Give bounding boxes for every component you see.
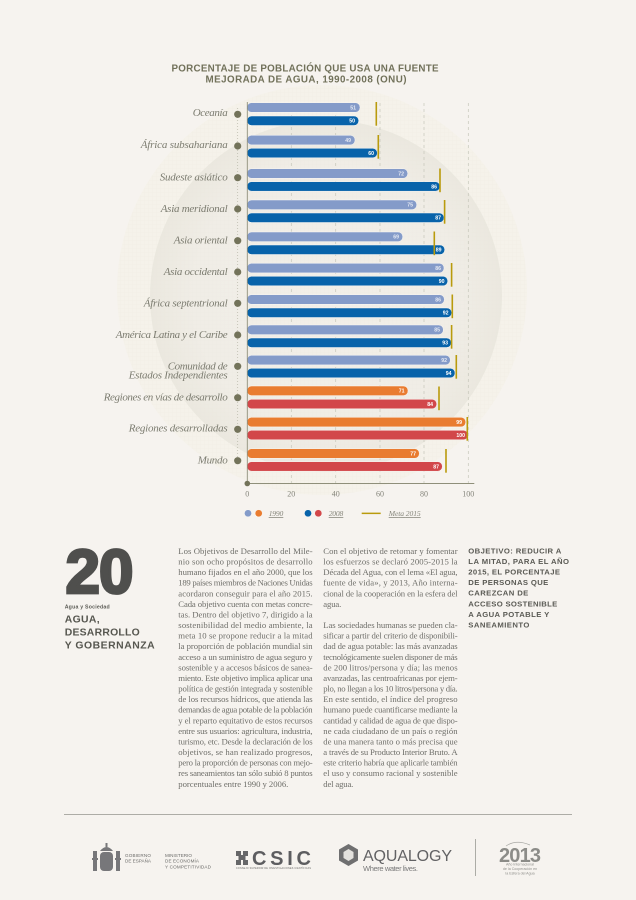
body text column 2: cantidad y calidad de agua de que dispo- — [323, 715, 458, 725]
legend: Meta 2015 — [388, 509, 421, 518]
bar row: Asia occidental: 90 — [439, 279, 445, 285]
bar row: Sudeste asiático: 86 — [431, 184, 437, 190]
bar row: Regiones desarrolladas: 99 — [456, 420, 462, 426]
bar row: Comunidad de Estados Independientes: Comunidad de — [168, 361, 228, 373]
body text column 1: Los Objetivos de Desarrollo del Mile- — [178, 546, 313, 556]
chart axes — [244, 102, 474, 499]
bar row: Sudeste asiático: 72 — [398, 171, 404, 177]
body text column 1: meta 10 se propone reducir a la mitad — [178, 631, 313, 641]
icon: Aqualogy cube — [339, 844, 358, 866]
chart axes: 40 — [332, 490, 340, 499]
bar row: África septentrional — [143, 294, 453, 318]
background concentric circles — [117, 85, 527, 495]
bar row: Oceanía — [193, 102, 377, 126]
bar row: Regiones en vías de desarrollo: Regiones en vías de desarrollo — [103, 391, 228, 403]
objective callout: DE PERSONAS QUE — [468, 578, 548, 587]
bar row: América Latina y el Caribe: América Latina y el Caribe — [115, 329, 228, 341]
bar row: Sudeste asiático: Sudeste asiático — [160, 172, 228, 184]
bar row: Asia oriental: 89 — [436, 248, 442, 254]
logo: Gobierno de España: DE ECONOMÍA — [165, 858, 200, 864]
logo: 2013 Año Internacional de la Cooperación: 2013 — [499, 845, 541, 867]
bar row: Asia occidental — [163, 263, 452, 287]
icon: CSIC mosaic — [236, 851, 248, 865]
logo: 2013 Año Internacional de la Cooperación: Año Internacional — [506, 862, 534, 866]
bar row: Asia meridional: 87 — [435, 216, 441, 222]
bar row: África subsahariana — [140, 135, 379, 159]
title: PORCENTAJE DE POBLACIÓN QUE USA UNA FUENTE — [172, 62, 439, 74]
chart axes: 100 — [462, 490, 474, 499]
objective callout: CAREZCAN DE — [468, 589, 528, 598]
logo: 2013 Año Internacional de la Cooperación: de la Cooperación en — [503, 867, 537, 871]
body text column 2: de 200 litros/persona y día; las menos — [323, 662, 458, 672]
bar row: Asia meridional: 75 — [407, 203, 413, 209]
chart axes: 0 — [245, 490, 249, 499]
body text column 1: entre sus usuarios: agricultura, industria, — [178, 726, 313, 736]
bar row: Mundo — [197, 449, 447, 473]
objective callout: SANEAMIENTO — [468, 620, 529, 630]
body text column 1: pero la proporción de personas con mejo- — [178, 758, 313, 768]
bar row: Regiones desarrolladas: Regiones desarrolladas — [128, 423, 228, 435]
body text column 1: sostenible y a accesos básicos de sanea- — [178, 662, 313, 672]
bar row: América Latina y el Caribe — [115, 325, 452, 349]
objective callout: OBJETIVO: REDUCIR A — [468, 546, 562, 555]
bar row: América Latina y el Caribe: 85 — [434, 328, 440, 334]
section number 20: 20 — [66, 538, 134, 607]
body text column 2: fuente de vida», y 2013, Año interna- — [323, 578, 458, 588]
bar row: Asia oriental: Asia oriental — [173, 235, 228, 247]
bar row: Oceanía: 50 — [349, 119, 355, 125]
logo: 2013 Año Internacional de la Cooperación — [499, 842, 541, 876]
body text column 1 — [178, 546, 313, 789]
title: MEJORADA DE AGUA, 1990-2008 (ONU) — [206, 74, 406, 86]
logo: Gobierno de España: MINISTERIO — [165, 853, 192, 858]
bar row: Mundo: 77 — [410, 451, 416, 457]
bar row: Mundo: Mundo — [197, 455, 228, 467]
body text column 1: objetivos, se han realizado progresos, — [178, 747, 313, 757]
logo: Aqualogy — [339, 844, 452, 873]
bar row: Oceanía: Oceanía — [193, 107, 228, 119]
body text column 1: la proporción de población mundial sin — [178, 641, 313, 651]
bar row: América Latina y el Caribe: 93 — [442, 341, 448, 347]
body text column 2: del agua. — [323, 779, 353, 789]
body text column 2: ne cada ciudadano de un país o región — [323, 726, 458, 736]
bar row: África subsahariana: África subsahariana — [140, 139, 228, 151]
bar row: África septentrional: 92 — [443, 311, 449, 317]
section heading: DESARROLLO — [65, 627, 140, 638]
chart axes: 60 — [376, 490, 384, 499]
body text column 2: los esfuerzos se declaró 2005-2015 la — [323, 557, 458, 567]
body text column 1: acordaron conseguir para el año 2015. — [178, 588, 313, 598]
body text column 2: dad de agua potable: las más avanzadas — [323, 641, 458, 651]
logo: CSIC: CONSEJO SUPERIOR DE INVESTIGACIONES CIENTÍFICAS — [236, 867, 311, 870]
icon: coat of arms — [92, 843, 121, 871]
body text column 2: sificar a partir del criterio de disponibili- — [323, 631, 458, 641]
objective callout: ACCESO SOSTENIBLE — [468, 599, 557, 608]
bar row: Regiones en vías de desarrollo: 71 — [399, 389, 405, 395]
body text column 1: tas. Dentro del objetivo 7, dirigido a la — [178, 610, 313, 620]
bar row: Asia oriental — [173, 232, 445, 255]
body text column 1: demandas de agua potable de la población — [178, 705, 313, 715]
section heading: Agua y Sociedad — [65, 604, 110, 610]
body text column 1: sostenibilidad del medio ambiente, la — [178, 620, 313, 630]
body text column 1: nio son ocho propósitos de desarrollo — [178, 557, 313, 567]
body text column 2: plo, no llegan a los 10 litros/persona y día. — [323, 684, 458, 694]
bar row: Comunidad de Estados Independientes: Estados Independientes — [128, 369, 228, 381]
bar chart: water access by region — [103, 102, 474, 499]
bar row: Regiones desarrolladas: 100 — [456, 433, 465, 439]
bar row: Sudeste asiático — [160, 168, 441, 192]
body text column 2: agua. — [323, 599, 341, 609]
body text column 2: Las sociedades humanas se pueden cla- — [323, 620, 458, 630]
bar row: Regiones en vías de desarrollo — [103, 386, 440, 410]
bar row: Oceanía: 51 — [350, 105, 356, 111]
logo: Gobierno de España: Y COMPETITIVIDAD — [165, 864, 212, 870]
bar row: Comunidad de Estados Independientes — [128, 355, 457, 381]
chart axes: 80 — [420, 490, 428, 499]
body text column 2: cional de la cooperación en la esfera del — [323, 588, 458, 598]
legend: 1990 — [269, 509, 284, 518]
logo: Gobierno de España: GOBIERNO — [125, 853, 151, 858]
bar row: África subsahariana: 49 — [345, 138, 351, 144]
body text column 1: turismo, etc. Desde la declaración de los — [178, 736, 313, 746]
body text column 1: y el reparto equitativo de estos recursos — [178, 715, 313, 725]
bar row: Asia oriental: 69 — [393, 235, 399, 241]
bar row: Asia meridional: Asia meridional — [160, 203, 228, 215]
bar row: Regiones en vías de desarrollo: 84 — [427, 402, 433, 408]
body text column 2: Década del Agua, con el lema «El agua, — [323, 567, 458, 577]
body text column 1: acceso a un suministro de agua seguro y — [178, 652, 313, 662]
body text column 1: Cada objetivo cuenta con metas concre- — [178, 599, 313, 609]
legend — [244, 509, 421, 518]
bar row: Regiones desarrolladas — [128, 417, 468, 441]
logo: Gobierno de España — [92, 843, 212, 871]
body text column 2: de una manera tanto o más precisa que — [323, 736, 458, 746]
body text column 1: política de gestión integrada y sostenible — [178, 684, 313, 694]
bar row: Asia meridional — [160, 200, 445, 224]
body text column 1: 189 países miembros de Naciones Unidas — [178, 578, 313, 588]
legend: 2008 — [329, 509, 344, 518]
objective callout — [468, 546, 569, 630]
title — [172, 62, 439, 86]
objective callout: A AGUA POTABLE Y — [468, 610, 549, 619]
logo: Gobierno de España: DE ESPAÑA — [125, 858, 152, 864]
body text column 2: el uso y consumo racional y sostenible — [323, 768, 458, 778]
body text column 2: este criterio habría que aplicarle también — [323, 758, 458, 768]
chart axes: 20 — [287, 490, 295, 499]
section heading — [65, 604, 155, 652]
body text column 1: humano fijados en el año 2000, que los — [178, 567, 313, 577]
body text column 2: humano puede cuantificarse mediante la — [323, 705, 458, 715]
bar row: Comunidad de Estados Independientes: 94 — [446, 371, 452, 377]
body text column 2: avanzadas, las centroafricanas por ejem- — [323, 673, 458, 683]
body text column 2: tecnológicamente suelen disponer de más — [323, 652, 458, 662]
body text column 2: Con el objetivo de retomar y fomentar — [323, 546, 458, 556]
bar row: África subsahariana: 60 — [368, 151, 374, 157]
body text column 2: En este sentido, el índice del progreso — [323, 694, 458, 704]
bar row: Asia occidental: Asia occidental — [163, 266, 228, 278]
bar row: Asia occidental: 86 — [435, 266, 441, 272]
logo: Aqualogy: AQUALOGY — [363, 848, 452, 865]
section heading: AGUA, — [65, 614, 100, 625]
section heading: Y GOBERNANZA — [65, 640, 155, 652]
bar row: Comunidad de Estados Independientes: 92 — [441, 358, 447, 364]
logo: 2013 Año Internacional de la Cooperación: la Esfera del Agua — [505, 872, 535, 876]
body text column 2 — [323, 546, 458, 789]
body text column 2: a través de su Producto Interior Bruto. A — [323, 747, 458, 757]
bar row: África septentrional: África septentrional — [143, 298, 228, 310]
body text column 1: miento. Este objetivo implica aplicar una — [178, 673, 313, 683]
body text column 1: res saneamientos tan sólo subió 8 puntos — [178, 768, 313, 778]
logo: CSIC: CSIC — [252, 848, 311, 870]
objective callout: 2015, EL PORCENTAJE — [468, 568, 560, 576]
objective callout: LA MITAD, PARA EL AÑO — [468, 557, 569, 566]
body text column 1: porcentuales entre 1990 y 2006. — [178, 779, 288, 789]
logo: Aqualogy: Where water lives. — [363, 864, 418, 873]
bar row: África septentrional: 86 — [435, 297, 441, 303]
bar row: Mundo: 87 — [433, 464, 439, 470]
body text column 1: de los recursos hídricos, que atienda las — [178, 694, 313, 704]
